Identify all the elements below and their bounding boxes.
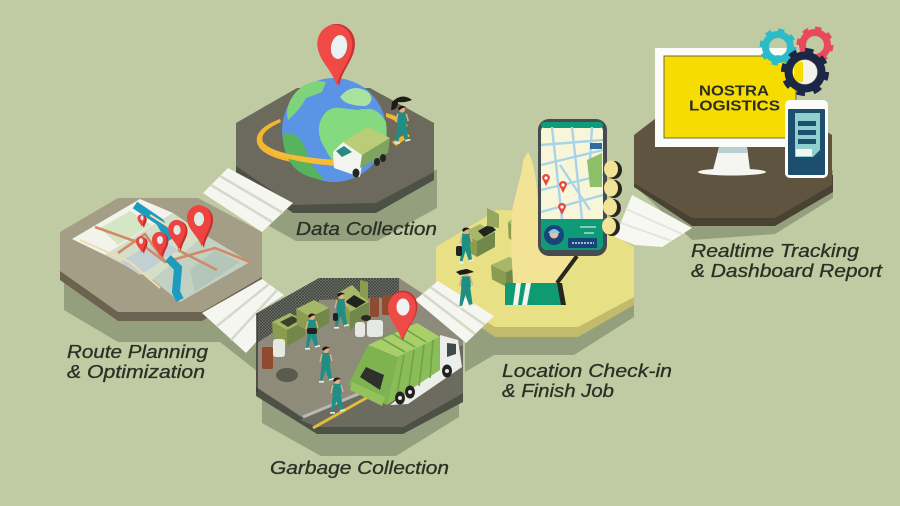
garbage truck	[348, 323, 462, 406]
green bins	[272, 280, 369, 346]
manhole	[276, 368, 298, 382]
platform: garbage collection	[256, 278, 463, 434]
caption: garbage collection: Garbage Collection	[270, 458, 449, 478]
caption: location check-in: Location Check-in	[502, 361, 672, 381]
garbage workers	[305, 313, 320, 350]
dashboard scene	[655, 29, 831, 178]
location pin	[316, 23, 357, 87]
caption: data collection: Data Collection	[296, 219, 437, 239]
caption: realtime tracking: & Dashboard Report	[691, 261, 883, 281]
fingers	[602, 160, 622, 236]
globe with truck and worker	[257, 23, 412, 182]
caption: route planning: & Optimization	[67, 362, 205, 382]
phone map	[541, 127, 603, 219]
location check-in scene	[456, 119, 622, 309]
smartphone	[538, 119, 607, 256]
front ring over globe	[264, 146, 338, 166]
brand name line two: LOGISTICS	[689, 98, 780, 114]
pillar shadows	[64, 170, 833, 456]
platform: location check-in	[436, 210, 634, 337]
caption: location check-in: & Finish Job	[502, 381, 614, 401]
truck location pin	[388, 291, 417, 341]
sleeve	[505, 283, 566, 305]
small phone	[785, 100, 828, 178]
white cans and bags	[273, 315, 383, 357]
map illustration	[72, 199, 250, 302]
caption: realtime tracking: Realtime Tracking	[691, 241, 859, 261]
platform: data collection	[236, 88, 434, 213]
globe	[282, 78, 387, 182]
garbage collection scene	[257, 278, 462, 428]
stairs: route to data	[203, 168, 293, 232]
fence	[257, 278, 319, 343]
brand name: NOSTRA	[699, 82, 769, 100]
workers on yellow platform	[459, 227, 474, 264]
navy gear	[784, 51, 826, 93]
teal gear	[762, 31, 794, 63]
barrels	[262, 295, 393, 369]
stairs: location to dashboard	[615, 195, 692, 247]
stairs: garbage to location	[415, 281, 494, 343]
monitor screen	[655, 48, 796, 147]
road markings	[303, 392, 363, 417]
platform: dashboard	[634, 115, 833, 226]
stairs: route to garbage	[202, 279, 284, 353]
map pins	[135, 204, 216, 259]
bins on yellow platform	[462, 208, 531, 287]
hand	[511, 152, 577, 283]
caption: route planning: Route Planning	[67, 342, 208, 362]
orange orbit ring	[257, 113, 410, 168]
phone driver card	[541, 219, 603, 250]
worker	[395, 106, 410, 144]
data truck	[333, 127, 390, 178]
platform: route planning	[60, 198, 262, 321]
monitor stand	[698, 147, 766, 176]
red gear	[799, 29, 831, 61]
